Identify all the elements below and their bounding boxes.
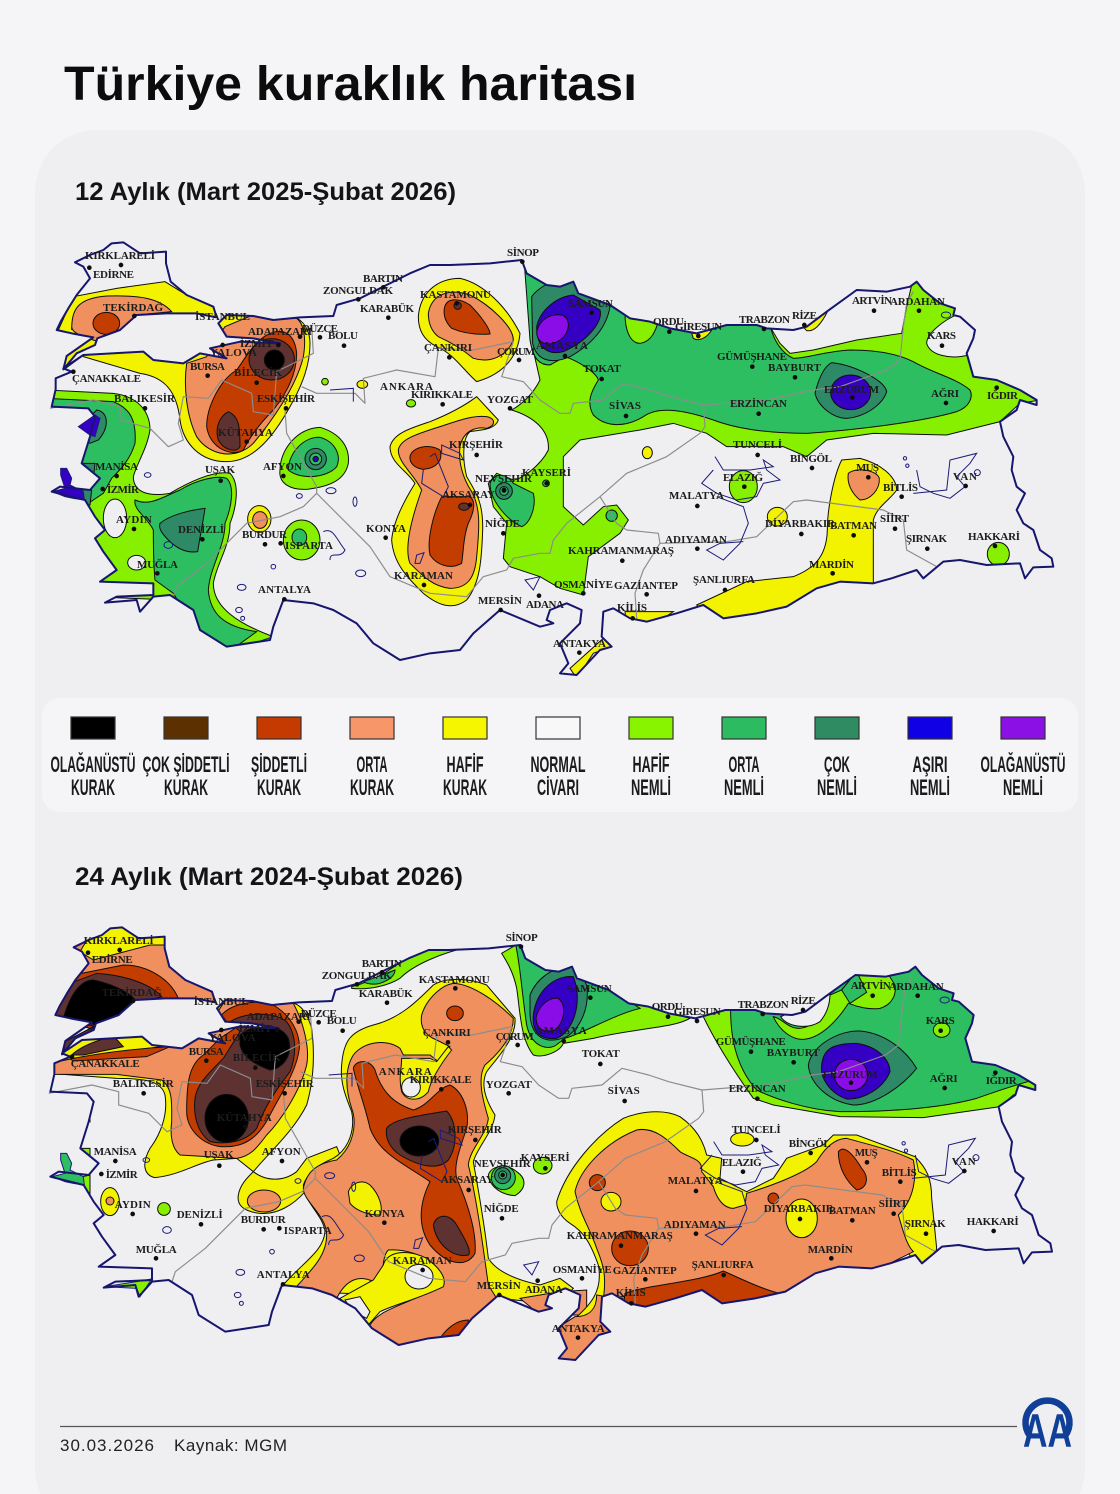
city labels, 12 month map: NEVŞEHİR bbox=[475, 473, 533, 485]
city labels, 12 month map: ELAZIĞ bbox=[723, 471, 763, 484]
city labels, 12 month map: BOLU bbox=[328, 330, 358, 342]
city labels, 12 month map: KASTAMONU bbox=[420, 289, 491, 301]
legend labels: ORTA bbox=[728, 752, 760, 777]
city labels, 24 month map: AĞRI bbox=[930, 1072, 958, 1085]
city labels, 24 month map: KIRŞEHİR bbox=[448, 1124, 503, 1136]
city labels, 24 month map: YOZGAT bbox=[486, 1079, 532, 1091]
city labels, 24 month map: KAHRAMANMARAŞ bbox=[567, 1230, 673, 1242]
legend labels: NEMLİ bbox=[817, 775, 857, 800]
city labels, 12 month map: ADANA bbox=[526, 599, 564, 611]
city labels, 12 month map: SİİRT bbox=[880, 513, 910, 525]
city labels, 24 month map: ARDAHAN bbox=[889, 981, 944, 993]
city labels, 12 month map: RİZE bbox=[792, 310, 817, 322]
city labels, 12 month map: TOKAT bbox=[583, 363, 622, 375]
city labels, 24 month map: SİVAS bbox=[608, 1085, 640, 1097]
city labels, 24 month map: KÜTAHYA bbox=[217, 1111, 272, 1124]
city labels, 12 month map: ADAPAZARI bbox=[248, 326, 312, 338]
city labels, 24 month map: BAYBURT bbox=[767, 1047, 820, 1059]
city labels, 24 month map: MUĞLA bbox=[136, 1243, 177, 1256]
city labels, 24 month map: SİİRT bbox=[879, 1198, 908, 1210]
city labels, 12 month map: AFYON bbox=[263, 461, 302, 473]
city labels, 24 month map: MUŞ bbox=[855, 1147, 878, 1159]
city labels, 12 month map: ŞIRNAK bbox=[906, 533, 947, 545]
city labels, 12 month map: SİNOP bbox=[507, 247, 539, 259]
city labels, 12 month map: TRABZON bbox=[739, 314, 790, 326]
city labels, 24 month map: ADANA bbox=[525, 1284, 563, 1296]
city labels, 24 month map: SAMSUN bbox=[567, 983, 612, 995]
city labels, 12 month map: ŞANLIURFA bbox=[693, 574, 755, 586]
city labels, 24 month map: KAYSERİ bbox=[521, 1152, 570, 1164]
city labels, 12 month map: KAHRAMANMARAŞ bbox=[568, 545, 674, 557]
legend labels: CİVARI bbox=[537, 775, 579, 800]
date: 30.03.2026 bbox=[60, 1436, 154, 1455]
legend labels: NEMLİ bbox=[1003, 775, 1043, 800]
city labels, 24 month map: GÜMÜŞHANE bbox=[716, 1035, 786, 1048]
city labels, 12 month map: BALIKESİR bbox=[114, 393, 176, 405]
city labels, 24 month map: BARTIN bbox=[362, 958, 402, 970]
legend labels: OLAĞANÜSTÜ bbox=[50, 752, 136, 777]
city labels, 12 month map: ZONGULDAK bbox=[323, 285, 393, 297]
city labels, 12 month map: GAZİANTEP bbox=[614, 580, 678, 592]
city labels, 12 month map: AMASYA bbox=[536, 340, 588, 352]
map: 24 month drought bbox=[49, 925, 1052, 1363]
city labels, 24 month map: ÇORUM bbox=[496, 1031, 534, 1043]
city labels, 12 month map: KÜTAHYA bbox=[218, 426, 273, 439]
coastal lake patches bbox=[53, 1153, 152, 1297]
city labels, 12 month map: KARS bbox=[927, 330, 956, 342]
city labels, 24 month map: ESKİŞEHİR bbox=[256, 1078, 315, 1090]
city labels, 24 month map: KARS bbox=[926, 1015, 955, 1027]
city labels, 24 month map: NİĞDE bbox=[484, 1202, 519, 1215]
city labels, 12 month map: ADIYAMAN bbox=[665, 534, 727, 546]
city labels, 24 month map: AMASYA bbox=[535, 1025, 587, 1037]
city labels, 12 month map: GİRESUN bbox=[675, 321, 722, 333]
city labels, 12 month map: BİNGÖL bbox=[790, 452, 832, 465]
heading: 12 month map: 12 Aylık (Mart 2025-Şubat 2026) bbox=[75, 178, 456, 206]
legend labels: KURAK bbox=[71, 775, 115, 800]
city labels, 12 month map: KONYA bbox=[366, 523, 406, 535]
city labels, 12 month map: İSTANBUL bbox=[195, 311, 250, 323]
city labels, 12 month map: DÜZCE bbox=[302, 322, 338, 335]
city labels, 24 month map: ÇANAKKALE bbox=[71, 1058, 140, 1070]
coastal lake patches bbox=[53, 415, 100, 500]
legend labels: KURAK bbox=[350, 775, 394, 800]
city labels, 12 month map: EDİRNE bbox=[93, 269, 134, 281]
city labels, 12 month map: BURDUR bbox=[242, 529, 288, 541]
city labels, 12 month map: KIRKLARELİ bbox=[85, 250, 155, 262]
city labels, 24 month map: KARAMAN bbox=[393, 1255, 452, 1267]
city labels, 12 month map: KARABÜK bbox=[360, 302, 414, 315]
legend panel bbox=[42, 698, 1078, 812]
legend labels: ÇOK ŞİDDETLİ bbox=[142, 752, 230, 777]
city labels, 24 month map: ZONGULDAK bbox=[322, 970, 392, 982]
city labels, 24 month map: BATMAN bbox=[829, 1205, 876, 1217]
city labels, 24 month map: ORDU bbox=[652, 1001, 683, 1013]
city labels, 12 month map: SAMSUN bbox=[568, 298, 613, 310]
city labels, 24 month map: DENİZLİ bbox=[177, 1209, 223, 1221]
city labels, 24 month map: DİYARBAKIR bbox=[764, 1203, 835, 1215]
city labels, 24 month map: AKSARAY bbox=[441, 1174, 494, 1186]
city labels, 24 month map: ARTVİN bbox=[851, 980, 891, 992]
city labels, 24 month map: IĞDIR bbox=[986, 1074, 1018, 1087]
city labels, 12 month map: YALOVA bbox=[210, 347, 257, 359]
city labels, 12 month map: UŞAK bbox=[205, 464, 235, 476]
city labels, 12 month map: AYDIN bbox=[116, 514, 152, 526]
heading: 24 month map: 24 Aylık (Mart 2024-Şubat 2026) bbox=[75, 863, 463, 891]
city labels, 24 month map: SİNOP bbox=[506, 932, 538, 944]
city labels, 24 month map: RİZE bbox=[791, 995, 816, 1007]
city labels, 24 month map: KIRKLARELİ bbox=[84, 935, 154, 947]
title: Türkiye kuraklık haritası bbox=[64, 58, 637, 111]
city labels, 24 month map: ANTAKYA bbox=[552, 1323, 605, 1335]
city labels, 12 month map: İZMİR bbox=[107, 484, 140, 496]
drought and wet regions, 12 month bbox=[47, 250, 1040, 678]
city labels, 12 month map: ARDAHAN bbox=[890, 296, 945, 308]
city labels, 12 month map: ESKİŞEHİR bbox=[257, 393, 316, 405]
city labels, 24 month map: ELAZIĞ bbox=[722, 1156, 762, 1169]
icon: AA logo: AA bbox=[1023, 1404, 1072, 1457]
city labels, 12 month map: TUNCELİ bbox=[733, 439, 782, 451]
city labels, 12 month map: MUĞLA bbox=[137, 558, 178, 571]
city labels, 12 month map: ANKARA bbox=[380, 381, 433, 393]
city labels, 24 month map: MERSİN bbox=[477, 1280, 521, 1292]
city labels, 24 month map: AFYON bbox=[262, 1146, 301, 1158]
city labels, 12 month map: ANTAKYA bbox=[553, 638, 606, 650]
legend swatches bbox=[71, 717, 1045, 739]
city labels, 12 month map: BİTLİS bbox=[883, 482, 918, 494]
city labels, 24 month map: BİLECİK bbox=[233, 1052, 281, 1064]
city labels, 12 month map: BİLECİK bbox=[234, 367, 282, 379]
legend labels: NEMLİ bbox=[910, 775, 950, 800]
city labels, 24 month map: KIRIKKALE bbox=[410, 1074, 472, 1086]
city labels, 12 month map: KARAMAN bbox=[394, 570, 453, 582]
city labels, 24 month map: ISPARTA bbox=[284, 1225, 332, 1237]
legend labels: KURAK bbox=[257, 775, 301, 800]
city labels, 12 month map: BURSA bbox=[190, 361, 225, 373]
city labels, 24 month map: İZMİT bbox=[239, 1023, 272, 1035]
legend labels bbox=[50, 752, 1066, 800]
city labels, 24 month map: TRABZON bbox=[738, 999, 789, 1011]
city labels, 12 month map: KIRIKKALE bbox=[411, 389, 473, 401]
city labels, 24 month map: ADIYAMAN bbox=[664, 1219, 726, 1231]
city labels, 24 month map: TUNCELİ bbox=[732, 1124, 781, 1136]
city labels, 24 month map: AYDIN bbox=[115, 1199, 151, 1211]
city labels, 24 month map: KONYA bbox=[365, 1208, 405, 1220]
city labels, 24 month map: ŞANLIURFA bbox=[692, 1259, 754, 1271]
legend labels: HAFİF bbox=[632, 752, 670, 777]
legend labels: KURAK bbox=[164, 775, 208, 800]
city labels, 12 month map: ORDU bbox=[653, 316, 684, 328]
city labels, 24 month map: ŞIRNAK bbox=[905, 1218, 946, 1230]
city labels, 24 month map: ADAPAZARI bbox=[247, 1011, 311, 1023]
city labels, 24 month map: OSMANİYE bbox=[553, 1264, 612, 1276]
city labels, 24 month map: MALATYA bbox=[668, 1175, 723, 1187]
legend labels: ŞİDDETLİ bbox=[251, 752, 307, 777]
city labels, 12 month map: ISPARTA bbox=[285, 540, 333, 552]
city labels, 12 month map: AKSARAY bbox=[442, 489, 495, 501]
city labels, 12 month map: IĞDIR bbox=[987, 389, 1019, 402]
city labels, 24 month map: BURDUR bbox=[241, 1214, 287, 1226]
city labels, 12 month map: DENİZLİ bbox=[178, 524, 224, 536]
map: 12 month drought bbox=[47, 242, 1053, 678]
city labels, 24 month map: VAN bbox=[952, 1156, 976, 1168]
city labels, 24 month map: UŞAK bbox=[204, 1149, 234, 1161]
city labels, 24 month map: ÇANKIRI bbox=[423, 1027, 471, 1039]
city labels, 24 month map: NEVŞEHİR bbox=[474, 1158, 532, 1170]
city labels, 12 month map: BATMAN bbox=[830, 520, 877, 532]
city labels, 24 month map: GİRESUN bbox=[674, 1006, 721, 1018]
city labels, 12 month map: VAN bbox=[953, 471, 977, 483]
city labels, 24 month map: ANTALYA bbox=[257, 1269, 310, 1281]
city labels, 12 month map: KIRŞEHİR bbox=[449, 439, 504, 451]
legend labels: ORTA bbox=[356, 752, 388, 777]
city labels, 12 month map: OSMANİYE bbox=[554, 579, 613, 591]
city labels, 24 month map: TOKAT bbox=[582, 1048, 620, 1060]
city labels, 12 month map: TEKİRDAĞ bbox=[103, 301, 163, 314]
city labels, 12 month map bbox=[72, 247, 1020, 650]
city labels, 24 month map: KİLİS bbox=[616, 1287, 646, 1299]
city labels, 24 month map: DÜZCE bbox=[301, 1007, 337, 1020]
city labels, 12 month map: SİVAS bbox=[609, 400, 641, 412]
legend labels: HAFİF bbox=[446, 752, 484, 777]
legend labels: NORMAL bbox=[530, 752, 586, 777]
city labels, 12 month map: NİĞDE bbox=[485, 517, 520, 530]
city labels, 12 month map: İZMİT bbox=[240, 338, 274, 350]
city labels, 12 month map: ÇORUM bbox=[497, 346, 536, 358]
city labels, 12 month map: ÇANAKKALE bbox=[72, 373, 141, 385]
city labels, 12 month map: ERZİNCAN bbox=[730, 398, 787, 410]
city labels, 12 month map: ARTVİN bbox=[852, 295, 892, 307]
city labels, 24 month map: MARDİN bbox=[808, 1244, 853, 1256]
city labels, 12 month map: ÇANKIRI bbox=[424, 342, 472, 354]
city labels, 24 month map: ANKARA bbox=[379, 1066, 432, 1078]
city labels, 24 month map: BALIKESİR bbox=[113, 1078, 175, 1090]
legend labels: AŞIRI bbox=[912, 752, 948, 777]
city labels, 12 month map: ERZURUM bbox=[824, 384, 880, 396]
city labels, 12 month map: MANİSA bbox=[95, 461, 138, 473]
city labels, 12 month map: DİYARBAKIR bbox=[765, 518, 836, 530]
legend labels: NEMLİ bbox=[631, 775, 671, 800]
city labels, 12 month map: MERSİN bbox=[478, 595, 522, 607]
city labels, 24 month map bbox=[71, 932, 1019, 1335]
city labels, 24 month map: BİTLİS bbox=[882, 1167, 917, 1179]
city labels, 24 month map: TEKİRDAĞ bbox=[102, 986, 162, 999]
city labels, 24 month map: BURSA bbox=[189, 1046, 224, 1058]
legend labels: ÇOK bbox=[824, 752, 850, 777]
city labels, 12 month map: HAKKARİ bbox=[968, 531, 1020, 543]
city labels, 24 month map: GAZİANTEP bbox=[613, 1265, 677, 1277]
city labels, 12 month map: BAYBURT bbox=[768, 362, 822, 374]
city labels, 12 month map: BARTIN bbox=[363, 273, 403, 285]
city labels, 24 month map: ERZİNCAN bbox=[729, 1083, 786, 1095]
source: Kaynak: MGM bbox=[174, 1436, 287, 1455]
city labels, 12 month map: ANTALYA bbox=[258, 584, 311, 596]
drought and wet regions, 24 month bbox=[50, 925, 1040, 1363]
icon: AA logo bbox=[1023, 1401, 1072, 1457]
city labels, 24 month map: MANİSA bbox=[94, 1146, 137, 1158]
city labels, 12 month map: MUŞ bbox=[856, 462, 879, 474]
city labels, 12 month map: KİLİS bbox=[617, 602, 647, 614]
city labels, 12 month map: GÜMÜŞHANE bbox=[717, 350, 787, 363]
city labels, 12 month map: YOZGAT bbox=[487, 394, 534, 406]
city labels, 12 month map: MARDİN bbox=[809, 559, 854, 571]
city labels, 24 month map: BİNGÖL bbox=[789, 1137, 831, 1150]
city labels, 24 month map: KASTAMONU bbox=[419, 974, 490, 986]
city labels, 24 month map: KARABÜK bbox=[359, 987, 413, 1000]
city labels, 24 month map: İZMİR bbox=[106, 1169, 139, 1181]
city labels, 24 month map: İSTANBUL bbox=[194, 996, 249, 1008]
legend labels: KURAK bbox=[443, 775, 487, 800]
city labels, 24 month map: EDİRNE bbox=[92, 954, 133, 966]
city labels, 24 month map: YALOVA bbox=[209, 1032, 256, 1044]
city labels, 12 month map: KAYSERİ bbox=[522, 467, 571, 479]
city labels, 24 month map: HAKKARİ bbox=[967, 1216, 1019, 1228]
city labels, 12 month map: MALATYA bbox=[669, 490, 724, 502]
city labels, 24 month map: ERZURUM bbox=[823, 1069, 878, 1081]
legend labels: NEMLİ bbox=[724, 775, 764, 800]
city labels, 24 month map: BOLU bbox=[327, 1015, 357, 1027]
city labels, 12 month map: AĞRI bbox=[931, 387, 959, 400]
